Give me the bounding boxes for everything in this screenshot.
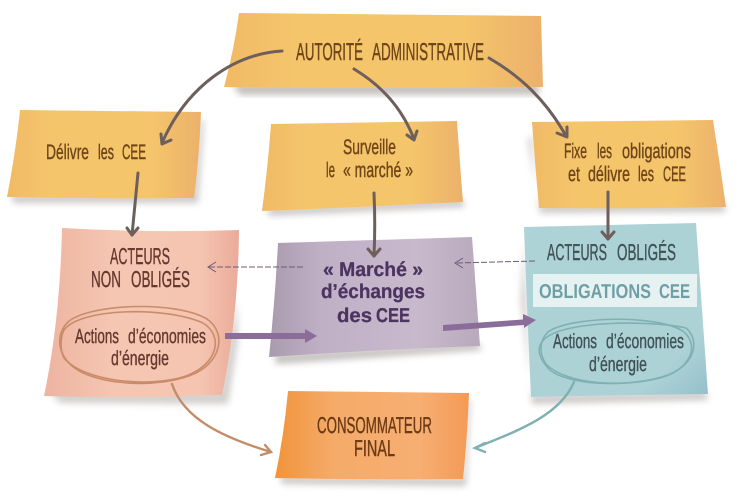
arrow: non obligés to consommateur [172,384,271,455]
text: actions d'économies: Actions [75,325,119,348]
heading: acteurs non obligés: ACTEURS [110,243,170,269]
heading: acteurs non obligés: NON [91,266,121,292]
text: fixe les obligations: CEE [663,163,686,186]
heading: marché d'échanges des CEE: des [337,305,372,327]
text: fixe les obligations: délivre [588,163,630,186]
text: actions d'économies: d’économies [128,325,206,348]
heading: autorité administrative: ADMINISTRATIVE [372,39,484,66]
text: actions d'économies: d’énergie [589,353,647,376]
panel: marché d'échanges [269,237,482,364]
arrow: autorité to fixe [489,58,567,137]
arrow: obligés to consommateur [475,382,574,452]
heading: consommateur final: FINAL [354,435,395,461]
arrow: dashed marché to non obligés [208,262,303,272]
panel: surveille le marché [262,121,465,216]
text: fixe les obligations: et [568,163,580,186]
text: surveille le marché: « marché » [343,159,413,182]
heading: acteurs non obligés: OBLIGÉS [131,266,190,292]
circled actions: pink [60,307,219,383]
circled actions: teal [539,319,694,384]
text: délivre les CEE: CEE [122,141,146,164]
text: surveille le marché: Surveille [343,136,396,159]
panel: fixe les obligations [528,120,726,213]
heading: marché d'échanges des CEE: « Marché » [323,259,423,281]
arrow: marché to obligés [443,314,536,331]
text: fixe les obligations: obligations [622,140,691,163]
label: obligations CEE [533,274,697,307]
heading: acteurs obligés: OBLIGÉS [617,239,676,265]
panel: délivre les CEE [7,110,204,203]
panel: autorité administrative [224,13,543,95]
label: obligations CEE: CEE [659,281,690,303]
text: délivre les CEE: Délivre [46,141,89,164]
arrow: fixe to obligés [602,192,614,239]
heading: marché d'échanges des CEE: CEE [376,305,410,327]
arrow: surveille to marché [368,193,380,256]
heading: acteurs obligés: ACTEURS [547,239,607,265]
text: fixe les obligations: les [638,163,654,186]
arrow: dashed obligés to marché [455,258,535,268]
text: actions d'économies: Actions [553,330,597,353]
text: surveille le marché: le [326,159,335,182]
panel: consommateur final [275,391,470,486]
text: actions d'économies: d’économies [606,330,684,353]
heading: autorité administrative: AUTORITÉ [296,38,363,66]
text: fixe les obligations: Fixe [564,140,587,163]
panel: acteurs non obligés [44,228,239,404]
heading: consommateur final: CONSOMMATEUR [317,412,432,438]
text: fixe les obligations: les [597,140,612,163]
label: obligations CEE: OBLIGATIONS [539,281,651,303]
arrow: non obligés to marché [225,329,317,343]
arrow: autorité to surveille [354,69,417,140]
arrow: délivre to non obligés [127,173,138,235]
panel: acteurs obligés [521,223,708,404]
text: actions d'économies: d’énergie [111,347,169,370]
text: délivre les CEE: les [98,141,114,164]
arrow: autorité to délivre [161,51,282,144]
heading: marché d'échanges des CEE: d’échanges [321,281,425,303]
